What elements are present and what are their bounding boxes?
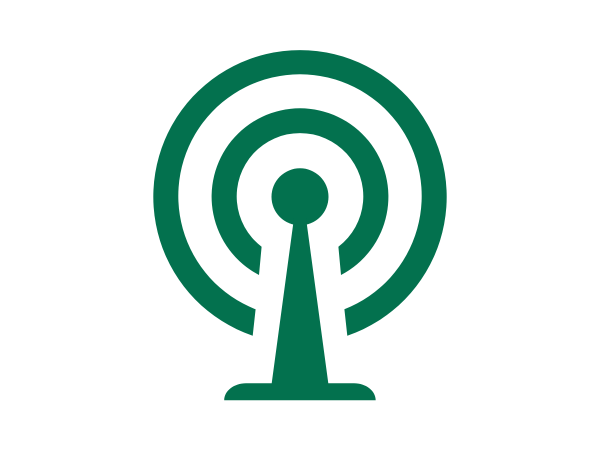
middle signal ring [212, 108, 388, 275]
outer signal ring [153, 50, 447, 336]
tower and base [224, 218, 376, 400]
antenna top dot [272, 168, 328, 225]
